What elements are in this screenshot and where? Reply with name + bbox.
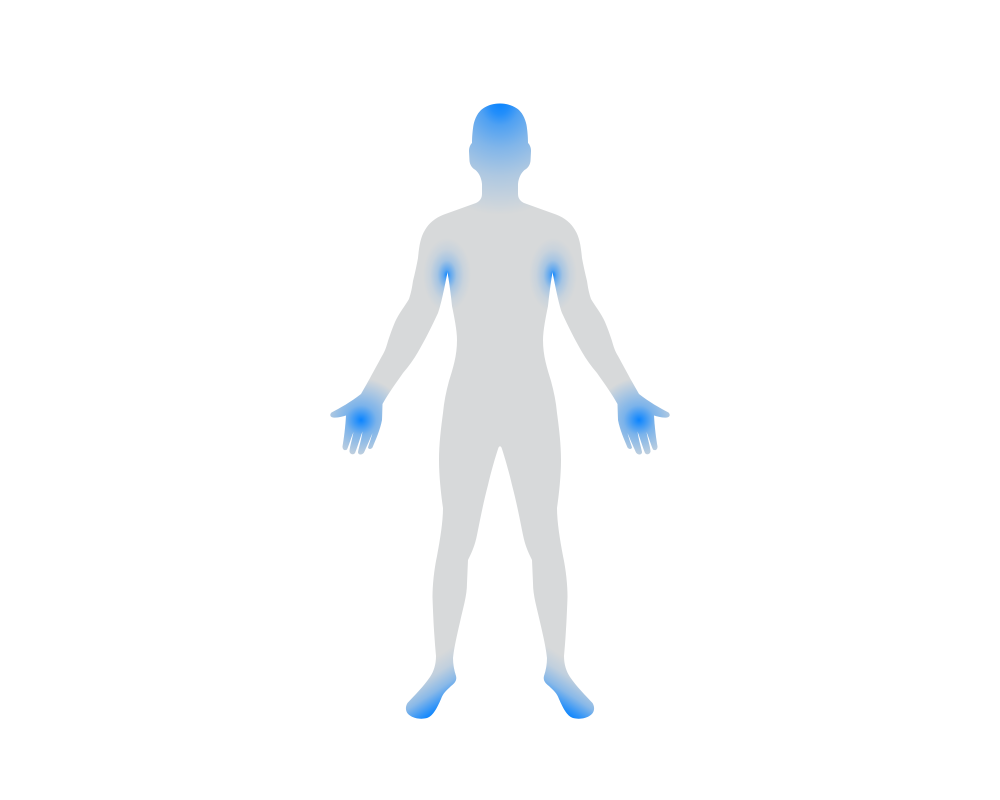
highlight: left armpit (427, 244, 467, 304)
highlight: right foot (544, 652, 594, 719)
highlight: left foot (406, 652, 456, 719)
highlight: right armpit (533, 244, 573, 304)
highlighted regions (316, 100, 684, 722)
highlight: right hand (610, 381, 670, 454)
body silhouette (330, 104, 670, 719)
highlight: head and neck (469, 104, 531, 207)
highlight: left hand (330, 381, 390, 454)
infographic: human body silhouette with highlighted regions (330, 104, 670, 719)
